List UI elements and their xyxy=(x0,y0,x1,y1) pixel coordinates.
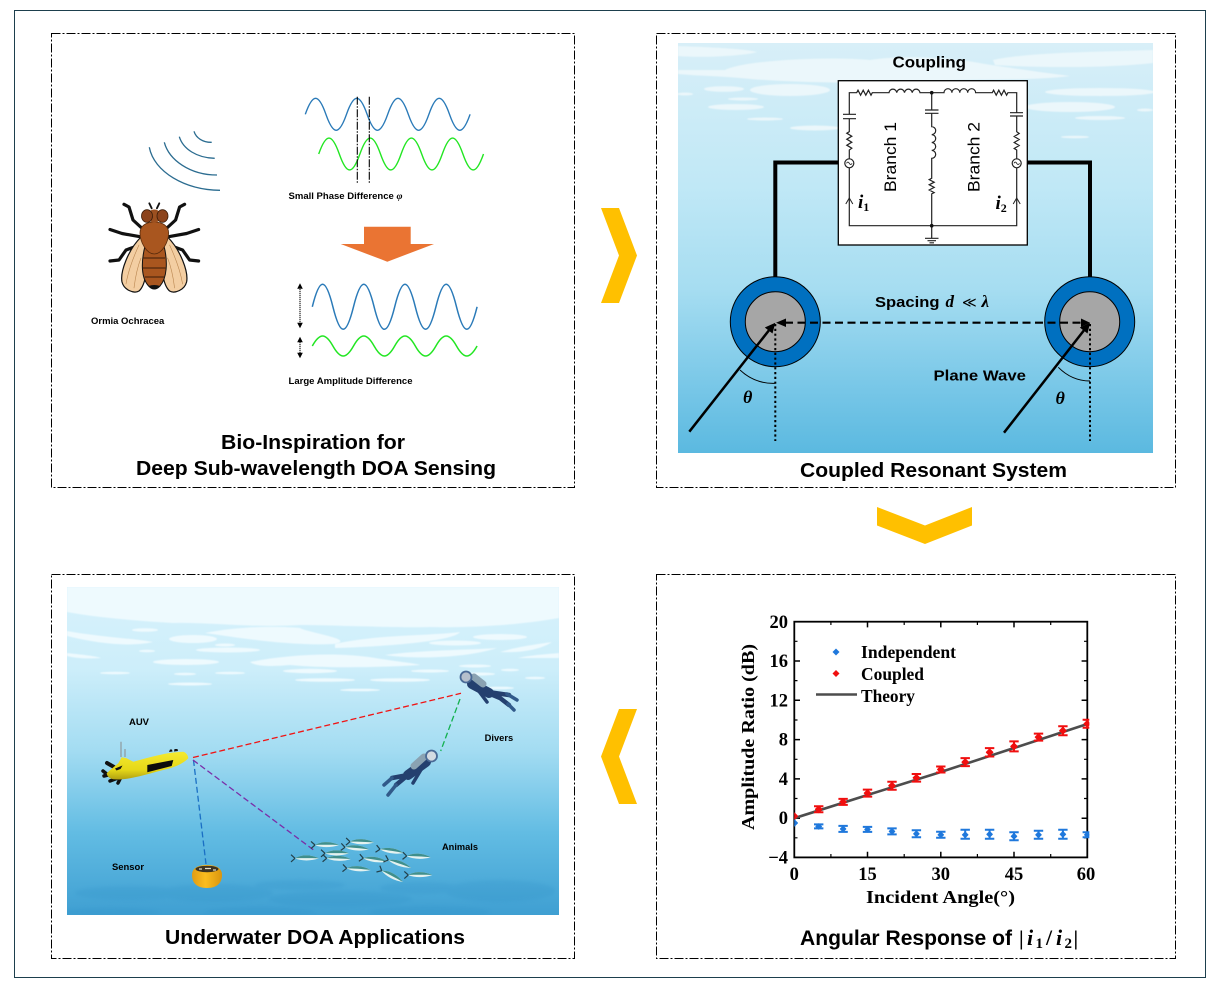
link: AUV to fish purple xyxy=(193,760,315,851)
circuit diagram xyxy=(838,81,1027,245)
x tick labels xyxy=(790,865,1095,885)
y tick labels: 8 xyxy=(779,730,788,750)
heading: panel 1 title: Deep Sub-wavelength DOA Sensing xyxy=(136,458,496,480)
heading: panel 4 title: i xyxy=(1027,925,1034,950)
label: i1: i xyxy=(858,192,863,213)
icon: fly xyxy=(110,203,199,292)
ocean scene background xyxy=(60,587,559,918)
label: plane wave: Plane Wave xyxy=(934,368,1026,384)
label: Branch 2: Branch 2 xyxy=(966,122,984,192)
panel: bio-inspiration xyxy=(52,34,574,488)
label: small phase difference: Small Phase Difference φ xyxy=(288,191,403,202)
label: theta right: θ xyxy=(1056,388,1066,408)
x tick labels: 0 xyxy=(790,865,799,885)
arrow: orange down xyxy=(341,227,434,262)
icon: lower diver xyxy=(384,750,437,795)
icon: AUV xyxy=(103,742,188,783)
series: independent xyxy=(791,820,1091,840)
x tick labels: 60 xyxy=(1077,865,1095,885)
y tick labels: 4 xyxy=(779,770,788,790)
chart: large amplitude difference waves xyxy=(297,283,477,358)
label: large amplitude difference: Large Amplitude Difference xyxy=(288,376,413,386)
sensor: left xyxy=(730,277,820,367)
label: spacing: ≪ xyxy=(962,295,977,311)
label: Ormia Ochracea: Ormia Ochracea xyxy=(91,316,165,326)
y tick labels: 12 xyxy=(770,692,788,712)
heading: panel 4 title: 1 xyxy=(1036,936,1043,952)
label: spacing: λ xyxy=(980,292,990,311)
link: divers green xyxy=(441,699,460,751)
label: Sensor: Sensor xyxy=(112,862,145,872)
label: spacing: d xyxy=(946,292,954,311)
chart: small phase difference waves xyxy=(305,97,484,183)
icon: upper diver xyxy=(460,672,517,710)
series: coupled xyxy=(791,720,1091,819)
legend: Theory xyxy=(861,686,915,706)
label: Branch 1: Branch 1 xyxy=(882,122,900,192)
arrow: plane wave left xyxy=(689,323,775,441)
heading: panel 2 title: Coupled Resonant System xyxy=(800,460,1067,482)
label: i2: 2 xyxy=(1001,201,1007,215)
y tick labels: 16 xyxy=(770,652,788,672)
legend xyxy=(816,642,956,706)
heading: panel 4 title: / xyxy=(1045,925,1053,950)
y tick labels: 20 xyxy=(770,613,788,633)
heading: panel 4 title: 2 xyxy=(1064,936,1072,952)
x tick labels: 45 xyxy=(1005,865,1023,885)
thick signal wires xyxy=(775,162,1090,278)
y tick labels xyxy=(768,613,788,868)
label: Animals: Animals xyxy=(442,842,478,852)
heading: panel 4 title: i xyxy=(1056,925,1063,950)
chart: amplitude ratio vs incident angle xyxy=(738,613,1095,908)
ocean background xyxy=(677,43,1155,453)
sound wave arcs xyxy=(149,131,220,190)
legend: Coupled xyxy=(861,664,924,684)
label: Divers: Divers xyxy=(485,733,513,743)
arrow: left chevron xyxy=(601,709,637,804)
sensor: right xyxy=(1045,277,1135,367)
icon: sensor buoy xyxy=(192,865,222,888)
arrow: right chevron xyxy=(601,208,637,303)
x axis title: Incident Angle(°) xyxy=(866,887,1015,908)
label: theta left: θ xyxy=(743,387,753,407)
label: AUV: AUV xyxy=(129,717,149,727)
arrow: down chevron xyxy=(877,507,972,544)
heading: panel 4 title: Angular Response of xyxy=(800,927,1013,950)
heading: panel 3 title: Underwater DOA Applications xyxy=(165,927,465,949)
y tick labels: −4 xyxy=(768,848,788,868)
y tick labels: 0 xyxy=(779,809,788,829)
x tick labels: 30 xyxy=(932,865,950,885)
y axis title: Amplitude Ratio (dB) xyxy=(738,644,759,830)
arrow: plane wave right xyxy=(1004,323,1090,441)
panel: coupled resonant system xyxy=(656,34,1176,488)
heading: panel 1 title: Bio-Inspiration for xyxy=(221,432,405,454)
label: spacing: Spacing xyxy=(875,294,940,311)
legend: Independent xyxy=(861,642,956,662)
icon: fish school xyxy=(291,838,432,885)
label: i2: i xyxy=(996,193,1001,214)
link: AUV to sensor blue xyxy=(194,760,206,864)
heading: panel 4 title: | xyxy=(1019,926,1024,950)
arrow: spacing dashed xyxy=(776,318,1090,327)
x tick labels: 15 xyxy=(858,865,877,885)
series: theory line xyxy=(794,724,1087,818)
link: AUV to diver red xyxy=(193,693,461,758)
panel: angular response chart xyxy=(656,574,1176,958)
panel: underwater applications xyxy=(52,574,574,958)
label: Coupling: Coupling xyxy=(892,54,966,72)
heading: panel 4 title: | xyxy=(1074,926,1078,950)
label: i1: 1 xyxy=(863,200,869,214)
